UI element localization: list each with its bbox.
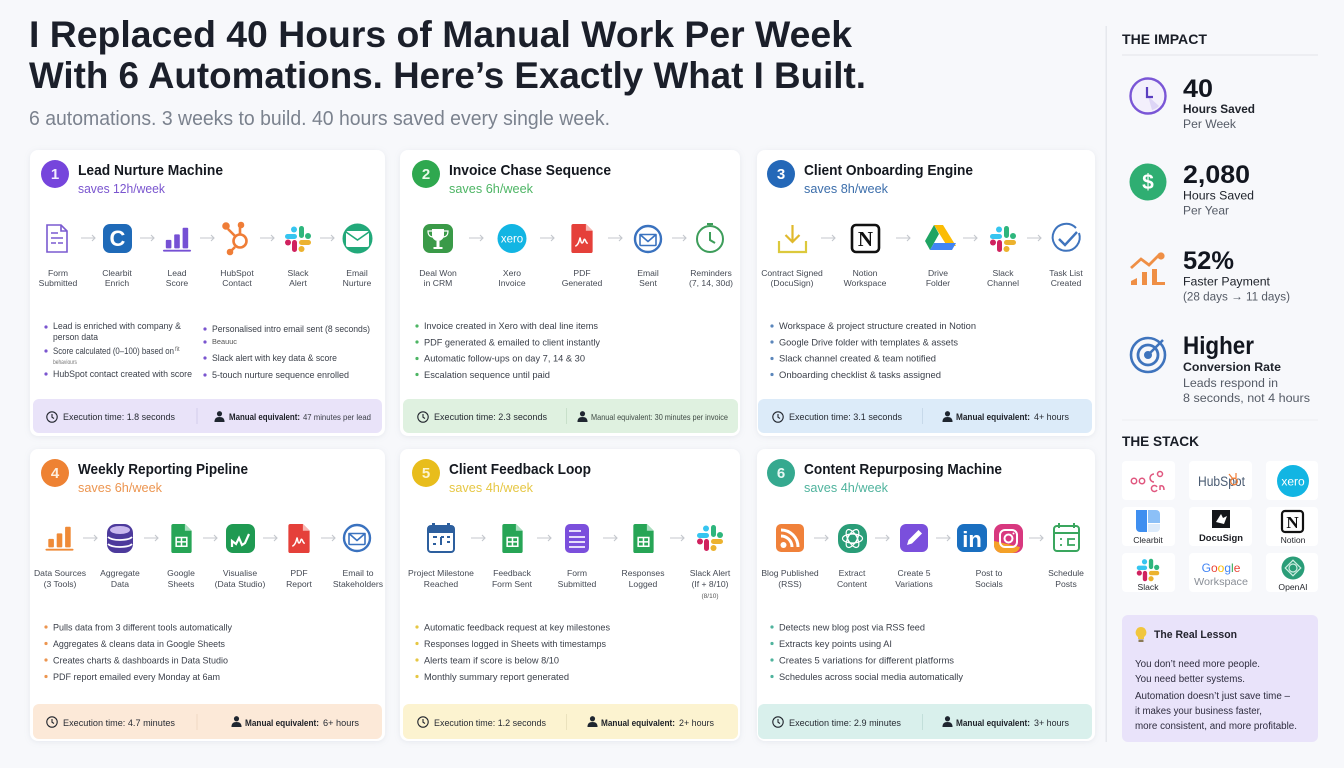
metric: 52% faster payment: 52% xyxy=(1183,247,1234,275)
badge 2: 2 xyxy=(422,166,430,183)
icon: slack xyxy=(697,525,723,551)
icon: data sources bars xyxy=(46,527,74,551)
icon: slack xyxy=(990,226,1016,252)
step labels: Google xyxy=(167,568,195,578)
icon: xero xyxy=(498,224,526,253)
step labels: Posts xyxy=(1055,579,1077,589)
step labels: Alert xyxy=(289,278,307,288)
time saved 5: saves 4h/week xyxy=(449,480,533,495)
step labels xyxy=(34,568,383,589)
footer stats 4: 6+ hours xyxy=(323,718,359,729)
footer stats 4 xyxy=(33,704,382,739)
step labels: Email to xyxy=(342,568,374,578)
icon: form submitted xyxy=(565,524,589,553)
panel: automation 4 weekly reporting pipeline xyxy=(30,449,385,741)
icon: feedback sheet xyxy=(502,524,523,553)
bullet list 6: Schedules across social media automatically xyxy=(779,672,963,682)
step labels: Email xyxy=(346,268,368,278)
badge 4 xyxy=(41,459,69,487)
bullet list 6: Detects new blog post via RSS feed xyxy=(779,622,925,632)
icon: trophy xyxy=(423,224,453,253)
step labels: Stakeholders xyxy=(333,579,383,589)
metric: 52% faster payment: (28 days → 11 days) xyxy=(1183,290,1290,304)
step labels: Project Milestone xyxy=(408,568,474,578)
step labels: Clearbit xyxy=(102,268,132,278)
step labels: Deal Won xyxy=(419,268,457,278)
lesson text: it makes your business faster, xyxy=(1135,706,1262,717)
bullet list 6: Creates 5 variations for different platforms xyxy=(779,656,954,666)
metric: higher conversion rate xyxy=(1131,332,1310,405)
badge 3: 3 xyxy=(777,166,785,183)
metric: 52% faster payment xyxy=(1131,247,1290,304)
bullet list 2: Invoice created in Xero with deal line items xyxy=(424,321,598,331)
bullet list 1: HubSpot contact created with score xyxy=(53,369,192,379)
step labels: Logged xyxy=(629,579,658,589)
icon: form xyxy=(47,225,67,252)
step labels: Data xyxy=(111,579,129,589)
footer stats 1: 47 minutes per lead xyxy=(303,412,371,422)
icon: pdf report xyxy=(288,524,310,553)
bullet list 4: Creates charts & dashboards in Data Studio xyxy=(53,656,228,666)
step labels: Form xyxy=(48,268,68,278)
footer stats 6: Execution time: 2.9 minutes xyxy=(789,718,901,729)
bullet list 5: Automatic feedback request at key milestones xyxy=(424,622,610,632)
step labels: Extract xyxy=(839,568,866,578)
footer stats 3 xyxy=(758,399,1092,433)
logo: clearbit: Clearbit xyxy=(1133,535,1163,545)
step labels: Feedback xyxy=(493,568,532,578)
step labels: Create 5 xyxy=(898,568,931,578)
title: With 6 Automations. Here’s Exactly What I Built. xyxy=(29,55,866,96)
logo: slack: Slack xyxy=(1137,582,1159,592)
title xyxy=(29,14,866,96)
footer stats 1: Manual equivalent: xyxy=(229,411,300,422)
logo: xero xyxy=(1266,461,1318,500)
arrows xyxy=(469,235,686,241)
panel: automation 5 client feedback loop xyxy=(400,449,740,741)
step labels: Email xyxy=(637,268,659,278)
metric: 52% faster payment: Faster Payment xyxy=(1183,274,1271,288)
step labels: Notion xyxy=(853,268,878,278)
footer stats 2 xyxy=(403,399,738,433)
time saved 1: saves 12h/week xyxy=(78,181,165,196)
footer stats 5: 2+ hours xyxy=(679,718,714,729)
metric: higher conversion rate: Conversion Rate xyxy=(1183,360,1281,374)
step labels: Reached xyxy=(424,579,458,589)
footer stats 6: Manual equivalent: xyxy=(956,717,1030,728)
bullet list 1: Beauuc xyxy=(212,339,238,346)
step labels: Slack xyxy=(992,268,1014,278)
heading: the stack: THE STACK xyxy=(1122,433,1199,449)
step labels: Slack xyxy=(287,268,309,278)
heading 3: Client Onboarding Engine xyxy=(804,162,973,179)
step labels: (DocuSign) xyxy=(770,278,814,288)
bullet list 4: PDF report emailed every Monday at 6am xyxy=(53,672,220,682)
workflow 4 xyxy=(34,524,383,589)
icon: email nurture xyxy=(342,224,372,254)
bullet list 1: Slack alert with key data & score xyxy=(212,353,337,363)
icon: light bulb xyxy=(1136,627,1146,642)
panel: automation 2 invoice chase sequence xyxy=(400,150,740,436)
step labels: Lead xyxy=(167,268,187,278)
icon: clock xyxy=(1130,78,1166,114)
metric: 2,080 hours saved per year: Per Year xyxy=(1183,204,1229,218)
badge 5: 5 xyxy=(422,465,430,482)
step labels: Xero xyxy=(503,268,521,278)
metric: 2,080 hours saved per year: Hours Saved xyxy=(1183,188,1254,202)
workflow 3 xyxy=(761,224,1083,288)
footer stats 5: Manual equivalent: xyxy=(601,717,675,728)
bullet list 3: Onboarding checklist & tasks assigned xyxy=(779,370,941,380)
bullet list 1: Score calculated (0–100) based on xyxy=(53,346,174,356)
metric: 2,080 hours saved per year xyxy=(1130,161,1254,218)
footer stats 2: Manual equivalent: 30 minutes per invoice xyxy=(591,412,728,422)
bullet list 2 xyxy=(415,321,600,380)
icon: reminders clock xyxy=(697,224,723,252)
metric: higher conversion rate: Higher xyxy=(1183,332,1254,360)
workflow 1 xyxy=(39,223,372,288)
logo: notion: Notion xyxy=(1281,535,1306,545)
footer stats 5 xyxy=(403,704,738,739)
lesson text: more consistent, and more profitable. xyxy=(1135,721,1297,732)
bullet list 1: person data xyxy=(53,332,99,342)
step labels: Schedule xyxy=(1048,568,1084,578)
footer stats 6: 3+ hours xyxy=(1034,718,1069,729)
lesson heading: The Real Lesson xyxy=(1154,629,1237,641)
logo: notion xyxy=(1266,507,1318,546)
step labels: Socials xyxy=(975,579,1003,589)
logo: notion: N xyxy=(1286,513,1299,532)
step labels xyxy=(408,568,731,600)
panel: the impact xyxy=(1122,31,1318,405)
footer stats 1: Execution time: 1.8 seconds xyxy=(63,412,175,423)
step labels: PDF xyxy=(290,568,308,578)
icon: xero: xero xyxy=(501,234,523,246)
icon: notion xyxy=(852,225,879,252)
bullet list 4 xyxy=(44,622,232,682)
footer stats 6 xyxy=(758,704,1092,739)
step labels: Post to xyxy=(976,568,1003,578)
title: I Replaced 40 Hours of Manual Work Per Week xyxy=(29,14,852,55)
step labels: Slack Alert xyxy=(690,568,731,578)
metric: 40 hours saved per week: Hours Saved xyxy=(1183,102,1255,116)
bullet list 2: PDF generated & emailed to client instantly xyxy=(424,338,600,348)
metric: 40 hours saved per week xyxy=(1130,75,1255,131)
arrows xyxy=(814,535,1043,541)
icon: email xyxy=(635,226,661,252)
lesson text: You don’t need more people. xyxy=(1135,659,1260,670)
icon: clearbit xyxy=(103,224,132,253)
icon: rss xyxy=(776,524,804,552)
panel: automation 1 lead nurture machine xyxy=(30,150,385,436)
icon: pdf xyxy=(571,224,593,253)
panel: the stack xyxy=(1122,433,1318,592)
icon: schedule calendar xyxy=(1054,523,1079,551)
footer stats 1 xyxy=(33,399,382,433)
arrows xyxy=(81,235,334,241)
step labels: (If + 8/10) xyxy=(691,579,729,589)
icon: create variations pencil xyxy=(900,524,928,552)
arrows xyxy=(471,535,684,541)
step labels: Content xyxy=(837,579,868,589)
icon: growth chart xyxy=(1131,252,1165,285)
icon: linkedin xyxy=(957,524,987,552)
icon: notion: N xyxy=(858,227,873,251)
step labels: Enrich xyxy=(105,278,129,288)
badge 1: 1 xyxy=(51,166,59,183)
bullet list 5: Responses logged in Sheets with timestamps xyxy=(424,639,606,649)
bullet list 1: 5-touch nurture sequence enrolled xyxy=(212,370,349,380)
footer stats 4: Manual equivalent: xyxy=(245,717,319,728)
step labels: Channel xyxy=(987,278,1019,288)
logo: openai: OpenAI xyxy=(1278,582,1308,592)
bullet list 1: fit xyxy=(175,347,180,353)
icon: task list xyxy=(1053,224,1080,251)
badge 5 xyxy=(412,459,440,487)
badge 2 xyxy=(412,160,440,188)
bullet list 3: Google Drive folder with templates & assets xyxy=(779,338,958,348)
lesson text: You need better systems. xyxy=(1135,674,1245,685)
step labels: Folder xyxy=(926,278,950,288)
icon: calendar milestone xyxy=(428,523,454,552)
step labels xyxy=(761,268,1083,288)
icon: linkedin: in xyxy=(962,527,982,552)
logo: n8n xyxy=(1122,461,1175,500)
bullet list 5 xyxy=(415,622,610,682)
badge 6: 6 xyxy=(777,465,785,482)
icon: instagram xyxy=(994,524,1023,553)
step labels: Submitted xyxy=(39,278,78,288)
step labels: (Data Studio) xyxy=(215,579,265,589)
heading: the impact: THE IMPACT xyxy=(1122,31,1207,47)
panel: automation 6 content repurposing machine xyxy=(757,449,1095,741)
time saved 2: saves 6h/week xyxy=(449,181,533,196)
step labels: Responses xyxy=(622,568,664,578)
bullet list 1: Personalised intro email sent (8 seconds) xyxy=(212,324,370,334)
step labels: Sent xyxy=(639,278,657,288)
icon: hubspot xyxy=(224,223,246,254)
logo: hubspot: HubSpot xyxy=(1198,474,1245,489)
step labels: Sheets xyxy=(168,579,194,589)
heading 1: Lead Nurture Machine xyxy=(78,162,223,179)
time saved 3: saves 8h/week xyxy=(804,181,888,196)
step labels: Nurture xyxy=(343,278,372,288)
step labels: Contact xyxy=(222,278,252,288)
badge 1 xyxy=(41,160,69,188)
logo: xero: xero xyxy=(1281,474,1305,488)
icon: email stakeholders xyxy=(344,525,370,551)
step labels: Score xyxy=(166,278,188,288)
bullet list 6 xyxy=(770,622,963,682)
heading 6: Content Repurposing Machine xyxy=(804,461,1002,478)
icon: contract download xyxy=(779,225,806,252)
icon: score bars xyxy=(163,228,191,252)
footer stats 2: Execution time: 2.3 seconds xyxy=(434,412,547,423)
bullet list 4: Aggregates & cleans data in Google Sheets xyxy=(53,639,225,649)
step labels: Invoice xyxy=(498,278,526,288)
icon: openai xyxy=(838,524,867,553)
logo: hubspot xyxy=(1189,461,1252,500)
footer stats 3: Execution time: 3.1 seconds xyxy=(789,412,902,423)
metric: 40 hours saved per week: Per Week xyxy=(1183,117,1237,131)
subtitle: 6 automations. 3 weeks to build. 40 hours saved every single week. xyxy=(29,108,610,130)
logo: google workspace: Google xyxy=(1202,561,1241,575)
step labels: Variations xyxy=(895,579,933,589)
icon: responses sheet xyxy=(633,524,654,553)
step labels xyxy=(761,568,1084,589)
icon: clearbit: C xyxy=(110,226,126,251)
bullet list 3 xyxy=(770,321,976,380)
time saved 6: saves 4h/week xyxy=(804,480,888,495)
footer stats 3: 4+ hours xyxy=(1034,412,1069,423)
bullet list 3: Workspace & project structure created in Notion xyxy=(779,321,976,331)
lesson text: Automation doesn’t just save time – xyxy=(1135,691,1290,702)
step labels: Drive xyxy=(928,268,948,278)
logo: clearbit xyxy=(1122,507,1175,546)
logo: docusign xyxy=(1189,507,1252,546)
step labels xyxy=(419,268,733,288)
icon: data studio xyxy=(226,524,255,553)
step labels xyxy=(39,268,372,288)
arrows xyxy=(83,535,335,541)
lesson text xyxy=(1135,659,1297,732)
bullet list 1 xyxy=(44,321,370,380)
footer stats 3: Manual equivalent: xyxy=(956,411,1030,422)
step labels: (3 Tools) xyxy=(44,579,77,589)
step labels: Data Sources xyxy=(34,568,86,578)
icon: google drive xyxy=(925,225,956,250)
step labels: HubSpot xyxy=(220,268,254,278)
badge 3 xyxy=(767,160,795,188)
heading 5: Client Feedback Loop xyxy=(449,461,591,478)
step labels: Generated xyxy=(562,278,603,288)
step labels: Blog Published xyxy=(761,568,819,578)
bullet list 5: Monthly summary report generated xyxy=(424,672,569,682)
icon: database xyxy=(107,524,133,553)
workflow 6 xyxy=(761,523,1084,589)
logo: slack xyxy=(1122,553,1175,592)
bullet list 5: Alerts team if score is below 8/10 xyxy=(424,656,559,666)
heading 2: Invoice Chase Sequence xyxy=(449,162,611,179)
panel: automation 3 client onboarding engine xyxy=(757,150,1095,436)
icon: google sheets xyxy=(171,524,192,553)
metric: 40 hours saved per week: 40 xyxy=(1183,75,1213,103)
heading 4: Weekly Reporting Pipeline xyxy=(78,461,248,478)
time saved 4: saves 6h/week xyxy=(78,480,162,495)
metric: higher conversion rate: Leads respond in xyxy=(1183,376,1278,390)
step labels: Form Sent xyxy=(492,579,533,589)
bullet list 6: Extracts key points using AI xyxy=(779,639,892,649)
metric: 2,080 hours saved per year: 2,080 xyxy=(1183,161,1250,189)
arrows xyxy=(821,235,1041,241)
bullet list 1: Lead is enriched with company & xyxy=(53,321,181,331)
callout: the real lesson xyxy=(1122,615,1318,742)
metric: higher conversion rate: 8 seconds, not 4 hours xyxy=(1183,391,1310,405)
workflow 5 xyxy=(408,523,731,600)
workflow 2 xyxy=(419,224,733,288)
logo: google workspace: Workspace xyxy=(1194,577,1248,588)
bullet list 1: behaviours xyxy=(53,360,77,366)
badge 6 xyxy=(767,459,795,487)
icon: slack xyxy=(285,226,311,252)
step labels: Report xyxy=(286,579,313,589)
logo: google workspace xyxy=(1189,553,1252,592)
step labels: Task List xyxy=(1049,268,1083,278)
step labels: Form xyxy=(567,568,587,578)
icon: target xyxy=(1131,338,1165,372)
step labels: Workspace xyxy=(844,278,887,288)
step labels: Contract Signed xyxy=(761,268,823,278)
bullet list 3: Slack channel created & team notified xyxy=(779,354,936,364)
step labels: in CRM xyxy=(424,278,452,288)
step labels: Visualise xyxy=(223,568,257,578)
footer stats 4: Execution time: 4.7 minutes xyxy=(63,718,175,729)
logo: docusign: DocuSign xyxy=(1199,533,1243,544)
icon: dollar: $ xyxy=(1142,171,1154,194)
bullet list 2: Automatic follow-ups on day 7, 14 & 30 xyxy=(424,354,585,364)
bullet list 2: Escalation sequence until paid xyxy=(424,370,550,380)
bullet list 4: Pulls data from 3 different tools automatically xyxy=(53,622,232,632)
badge 4: 4 xyxy=(51,465,60,482)
step labels: (8/10) xyxy=(702,593,718,600)
step labels: Aggregate xyxy=(100,568,140,578)
step labels: PDF xyxy=(573,268,591,278)
logo: openai xyxy=(1266,553,1318,592)
step labels: Created xyxy=(1051,278,1082,288)
step labels: (7, 14, 30d) xyxy=(689,278,733,288)
step labels: Submitted xyxy=(558,579,597,589)
step labels: (RSS) xyxy=(778,579,802,589)
step labels: Reminders xyxy=(690,268,732,278)
footer stats 5: Execution time: 1.2 seconds xyxy=(434,718,546,729)
